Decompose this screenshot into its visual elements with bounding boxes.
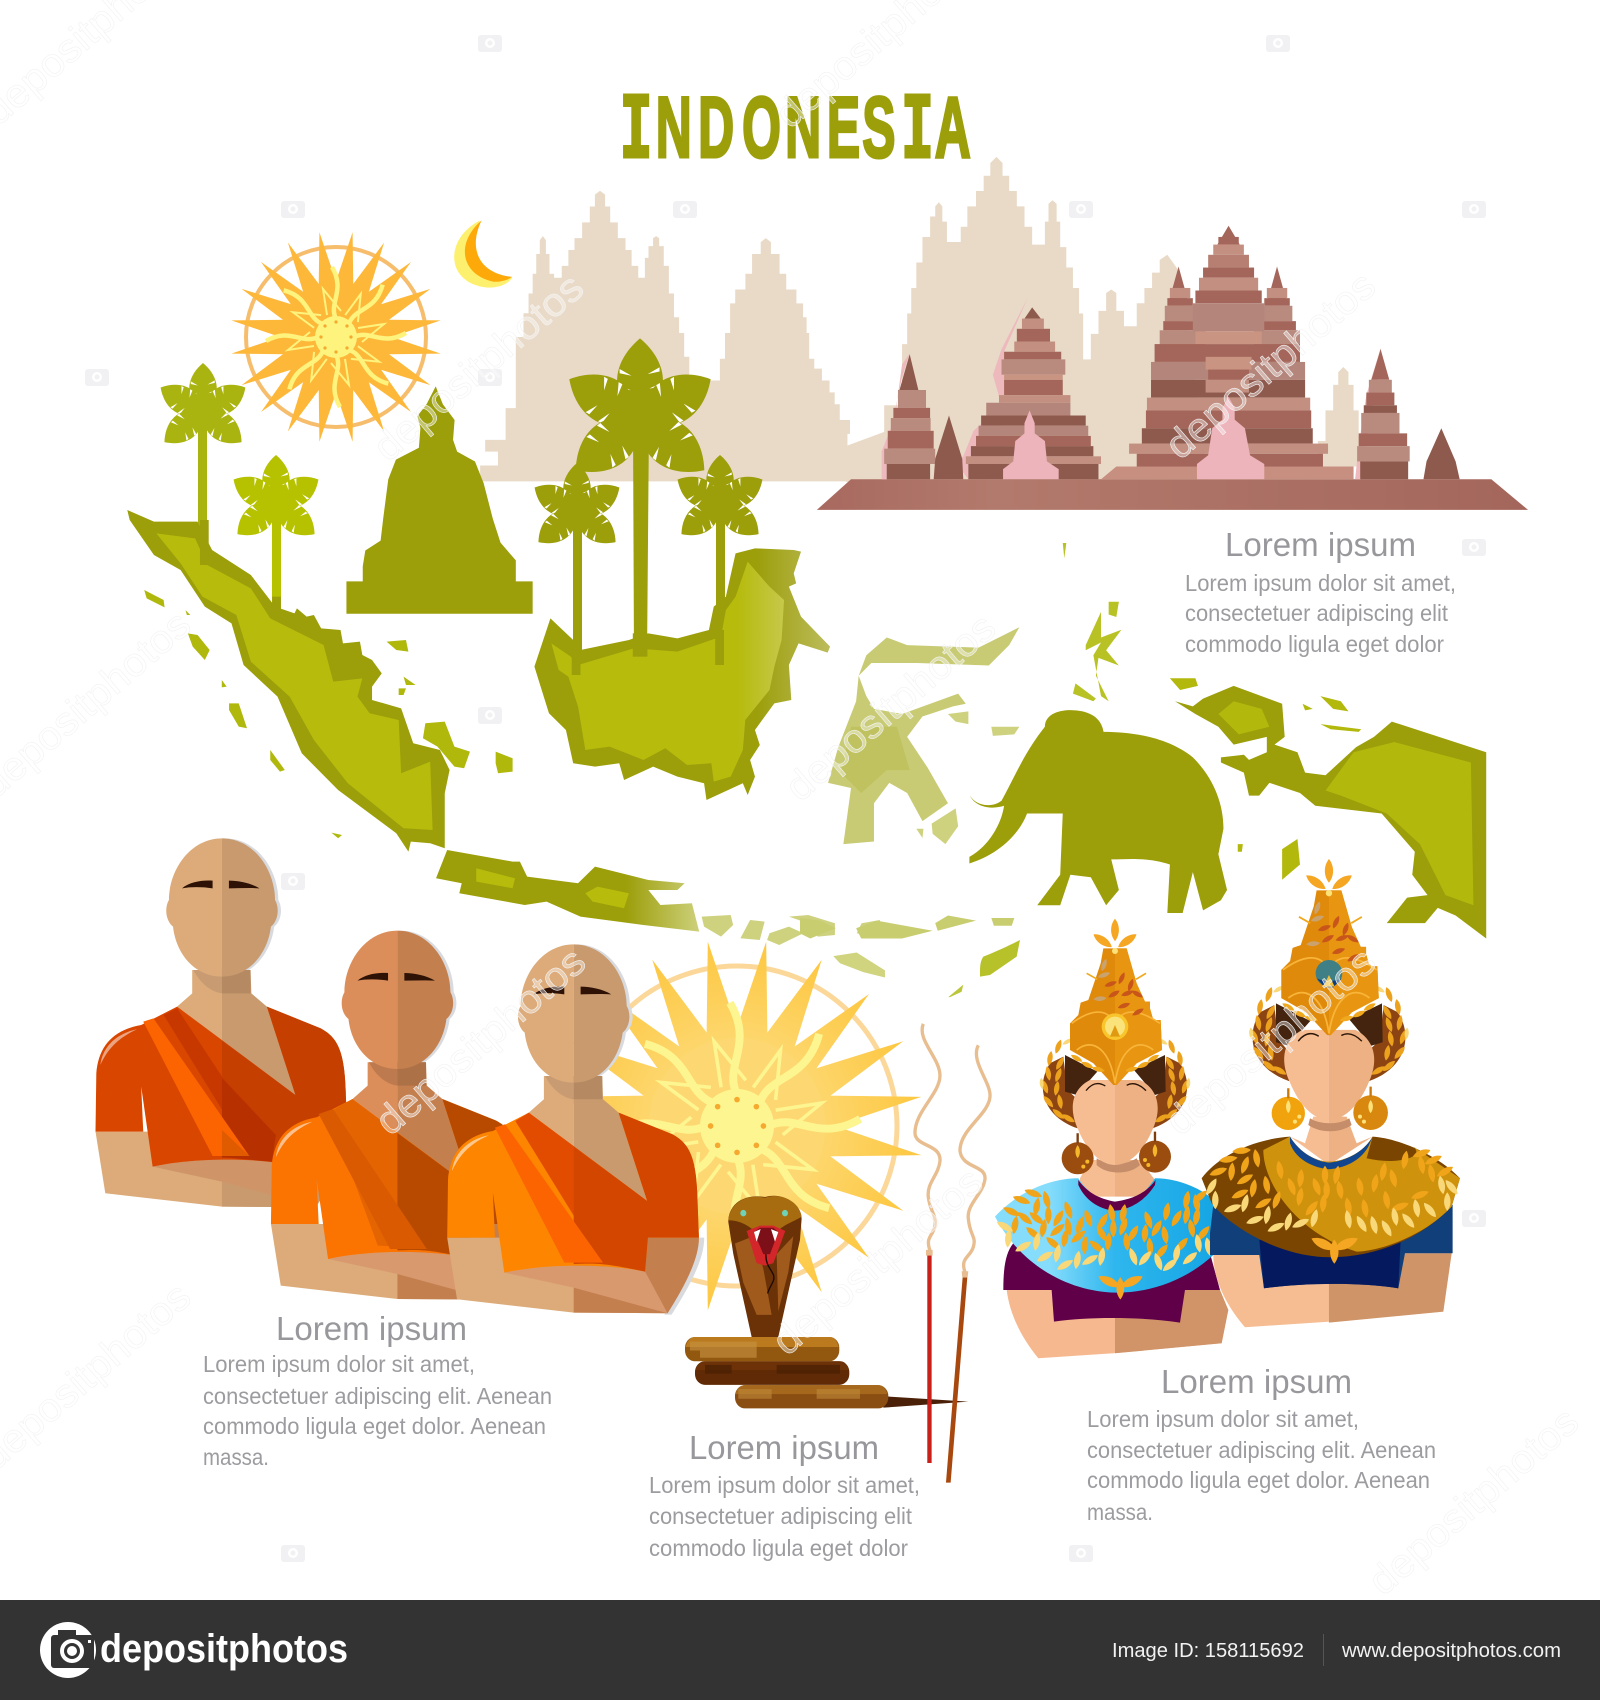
Lesser Sunda islands xyxy=(702,915,880,945)
elephant silhouette xyxy=(969,710,1227,913)
text block: dancers: massa. xyxy=(1087,1499,1153,1525)
diagonal depositphotos watermarks: depositphotos xyxy=(764,1159,991,1364)
temple base platform xyxy=(817,479,1528,510)
temple silhouettes, left beige group xyxy=(480,191,881,481)
title: N xyxy=(656,79,692,175)
title: I xyxy=(620,80,652,186)
left temple xyxy=(966,307,1101,479)
text block: dancers: Lorem ipsum xyxy=(1161,1363,1352,1400)
text block: cobra: commodo ligula eget dolor xyxy=(649,1535,908,1561)
footer bar xyxy=(0,1600,1600,1700)
dancers xyxy=(995,859,1460,1358)
right tower xyxy=(1355,348,1410,479)
islands along southern chain xyxy=(800,916,1014,938)
text block: monks: Lorem ipsum dolor sit amet, xyxy=(203,1351,475,1377)
temple silhouettes, right beige group xyxy=(846,157,1361,482)
main temple with twin towers xyxy=(1129,226,1328,467)
Sumatra xyxy=(127,510,450,852)
map of Indonesia, western islands xyxy=(127,510,880,945)
small islands near Papua xyxy=(1170,678,1361,880)
text block: upper right xyxy=(1185,526,1456,657)
text block: upper right: Lorem ipsum dolor sit amet, xyxy=(1185,570,1456,596)
text block: cobra: consectetuer adipiscing elit xyxy=(649,1503,913,1529)
title: N xyxy=(785,79,821,175)
cobra tongue xyxy=(766,1254,774,1293)
title: E xyxy=(827,79,860,175)
Timor island xyxy=(980,940,1020,977)
cobra mouth xyxy=(747,1226,785,1266)
title: A xyxy=(935,79,971,175)
title: D xyxy=(698,79,734,175)
diagonal depositphotos watermarks: depositphotos xyxy=(367,939,594,1144)
palm tree 2 xyxy=(227,455,325,617)
hood scales xyxy=(735,1236,793,1315)
upper sun xyxy=(230,231,442,443)
text block: upper right: consectetuer adipiscing elit xyxy=(1185,600,1449,626)
title: I xyxy=(901,80,934,186)
title: O xyxy=(742,79,781,175)
title: S xyxy=(862,79,895,175)
diagonal depositphotos watermarks: depositphotos xyxy=(365,265,592,470)
text block: monks: massa. xyxy=(203,1444,269,1470)
text block: monks xyxy=(203,1310,552,1470)
text block: dancers: consectetuer adipiscing elit. Aenean xyxy=(1087,1437,1436,1463)
text block: dancers: commodo ligula eget dolor. Aenean xyxy=(1087,1467,1430,1493)
text block: monks: consectetuer adipiscing elit. Aenean xyxy=(203,1383,552,1409)
Java xyxy=(436,850,699,932)
text block: cobra: Lorem ipsum dolor sit amet, xyxy=(649,1472,920,1498)
lower islands: Sumba and Timor xyxy=(833,952,963,997)
palm tree 1 xyxy=(154,363,252,560)
incense stick 1 xyxy=(926,1250,933,1463)
text block: upper right: commodo ligula eget dolor xyxy=(1185,631,1444,657)
cobra eyes xyxy=(740,1210,788,1216)
diagonal depositphotos watermarks: depositphotos xyxy=(1157,263,1384,468)
monks group xyxy=(96,838,704,1315)
Maluku islands xyxy=(1063,543,1121,701)
snake coil 2 xyxy=(695,1361,849,1385)
diagonal depositphotos watermarks: depositphotos xyxy=(1157,939,1384,1144)
monk 3 xyxy=(447,944,704,1315)
crescent moon xyxy=(454,220,512,288)
incense smoke 1 xyxy=(915,1024,940,1251)
incense stick 2 xyxy=(946,1271,968,1483)
pink buddha small xyxy=(1003,410,1059,479)
dancer woman left xyxy=(995,919,1228,1358)
small islands near Sulawesi xyxy=(916,711,1019,844)
palm tree 4 xyxy=(528,463,626,677)
monk 2 xyxy=(271,931,523,1300)
palm tree 3 large xyxy=(558,338,722,660)
image id: Image ID: 158115692 xyxy=(1112,1640,1304,1662)
brown temple complex xyxy=(817,226,1528,510)
small dark tower xyxy=(934,416,963,479)
palm trunk roots on Kalimantan xyxy=(200,520,724,675)
snake tail xyxy=(883,1396,968,1408)
cobra snake xyxy=(685,1024,990,1483)
camera watermark icons xyxy=(85,35,1486,1562)
small dark tower right xyxy=(1423,428,1460,479)
monk 1 xyxy=(96,838,347,1207)
text block: monks: Lorem ipsum xyxy=(276,1310,467,1347)
Papua xyxy=(1175,686,1486,938)
dancer woman right xyxy=(1202,859,1460,1327)
pink buddha large xyxy=(1197,397,1264,479)
Kalimantan xyxy=(534,548,830,800)
text block: cobra: Lorem ipsum xyxy=(689,1429,879,1466)
snake coil 1 xyxy=(685,1337,839,1361)
Sulawesi xyxy=(828,627,1019,844)
text block: dancers: Lorem ipsum dolor sit amet, xyxy=(1087,1406,1359,1432)
cobra head xyxy=(728,1196,802,1236)
small islands near Sumatra xyxy=(144,590,513,838)
footer logo icon xyxy=(40,1622,96,1678)
cobra hood xyxy=(728,1196,802,1337)
text block: dancers xyxy=(1087,1363,1436,1525)
text block: upper right: Lorem ipsum xyxy=(1225,526,1416,563)
palm tree 5 xyxy=(671,455,769,666)
snake coil 3 xyxy=(735,1385,888,1408)
text block: cobra xyxy=(649,1429,920,1561)
text block: monks: commodo ligula eget dolor. Aenean xyxy=(203,1413,546,1439)
website url: www.depositphotos.com xyxy=(1341,1640,1561,1662)
lower sun xyxy=(550,939,924,1313)
upper platform xyxy=(1101,467,1354,479)
pink shadow of left temple xyxy=(956,297,1028,479)
diagonal depositphotos watermarks: depositphotos xyxy=(1360,1399,1587,1604)
map of Indonesia, eastern islands xyxy=(800,543,1486,938)
footer brand: depositphotos xyxy=(100,1627,348,1671)
diagonal depositphotos watermarks: depositphotos xyxy=(777,605,1004,810)
buddha statue silhouette xyxy=(346,386,533,614)
incense smoke 2 xyxy=(960,1045,990,1272)
small tower left xyxy=(882,353,935,479)
